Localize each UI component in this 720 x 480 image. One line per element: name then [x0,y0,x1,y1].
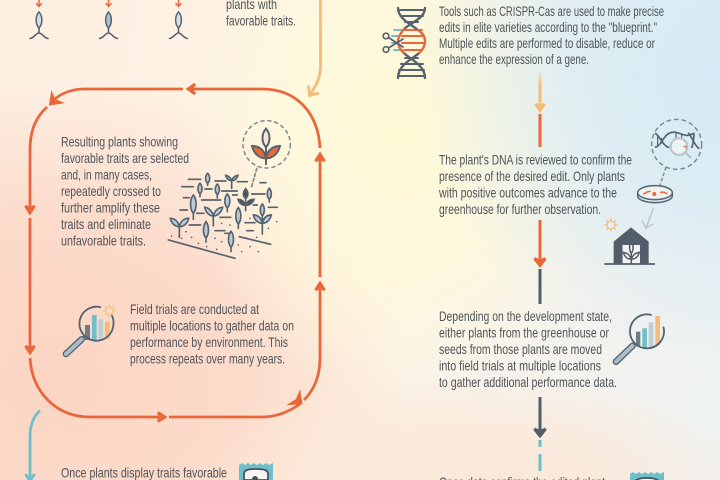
text: plants with favorable traits: favorable traits. [226,14,296,28]
arrow: orange down arrow [534,220,546,266]
text: development state: into field trials at multiple locations [439,358,601,374]
text: field trials: Field trials are conducted at [130,302,259,317]
icon: seed bag right [630,472,664,480]
text: selection of favorable plants: favorable traits are selected [61,151,189,166]
arrow: teal dashes [538,440,542,471]
text: DNA review: with positive outcomes advance to the [438,186,617,200]
text: DNA review: greenhouse for further observation. [439,202,601,217]
icon: seedling 2 [100,0,118,38]
text: development state [439,309,617,390]
text: development state: to gather additional performance data. [439,375,617,390]
text: CRISPR tools [439,4,664,67]
icon: magnifier with bar chart [616,314,664,362]
icon: magnifier with bar chart and sun [66,304,116,354]
icon: seedling 1 [30,0,48,38]
text: selection of favorable plants: traits and eliminate [61,217,151,232]
text: DNA review: presence of the desired edit. Only plants [439,169,625,184]
text: field trials: process repeats over many years. [130,352,285,366]
icon: field of plants [168,167,277,258]
text: field trials: multiple locations to gather data on [130,318,294,334]
text: DNA review [438,152,632,217]
scissors [383,33,389,39]
arrow: orange segment [538,114,542,147]
arrow: selection and field-trial loop [26,84,324,422]
sprouts [226,175,238,188]
field row lines [168,167,277,258]
text: development state: either plants from the greenhouse or [439,326,609,340]
tall leaf plants [206,173,210,185]
text: field trials: performance by environment. This [130,335,288,350]
text: selection of favorable plants: repeatedly crossed to [61,184,161,199]
icon: seedling 3 [170,0,188,38]
text: selection of favorable plants: and, in many cases, [61,168,152,182]
icon: seed bag left [239,463,273,480]
text: selection of favorable plants: Resulting plants showing [61,134,178,150]
selected dark plant [238,189,254,211]
text: selection of favorable plants: further amplify these [61,200,160,216]
arrow: dark down arrow [534,397,546,436]
text: field trials [130,302,294,366]
text: development state: Depending on the development state, [439,309,612,324]
arrow: dark segment [538,269,542,304]
arrow: peach down arrow [536,73,544,110]
icon: DNA under magnifier, petri dish and greenhouse [604,119,702,264]
petri dish [638,186,672,203]
scattered soil dots [171,217,277,252]
text: selection of favorable plants: unfavorable traits. [61,234,146,248]
DNA strands [404,8,425,29]
DNA base pairs [399,10,424,76]
panel: top-left seedlings [30,0,188,38]
text: CRISPR tools: enhance the expression of a gene. [439,52,589,67]
dashed circle with DNA [652,119,702,169]
arrow: peach connector into loop [308,0,320,96]
text: selection of favorable plants [61,134,189,248]
text: plants with favorable traits [226,0,296,28]
greenhouse [604,227,655,264]
icon: selected plant in dashed circle [243,121,290,168]
icon: DNA with CRISPR scissors [383,8,425,78]
text: DNA review: The plant's DNA is reviewed to confirm the [439,152,632,168]
sun [604,218,618,232]
text: development state: seeds from those plants are moved [439,342,602,357]
arrow: teal connector leaving loop [26,410,40,480]
